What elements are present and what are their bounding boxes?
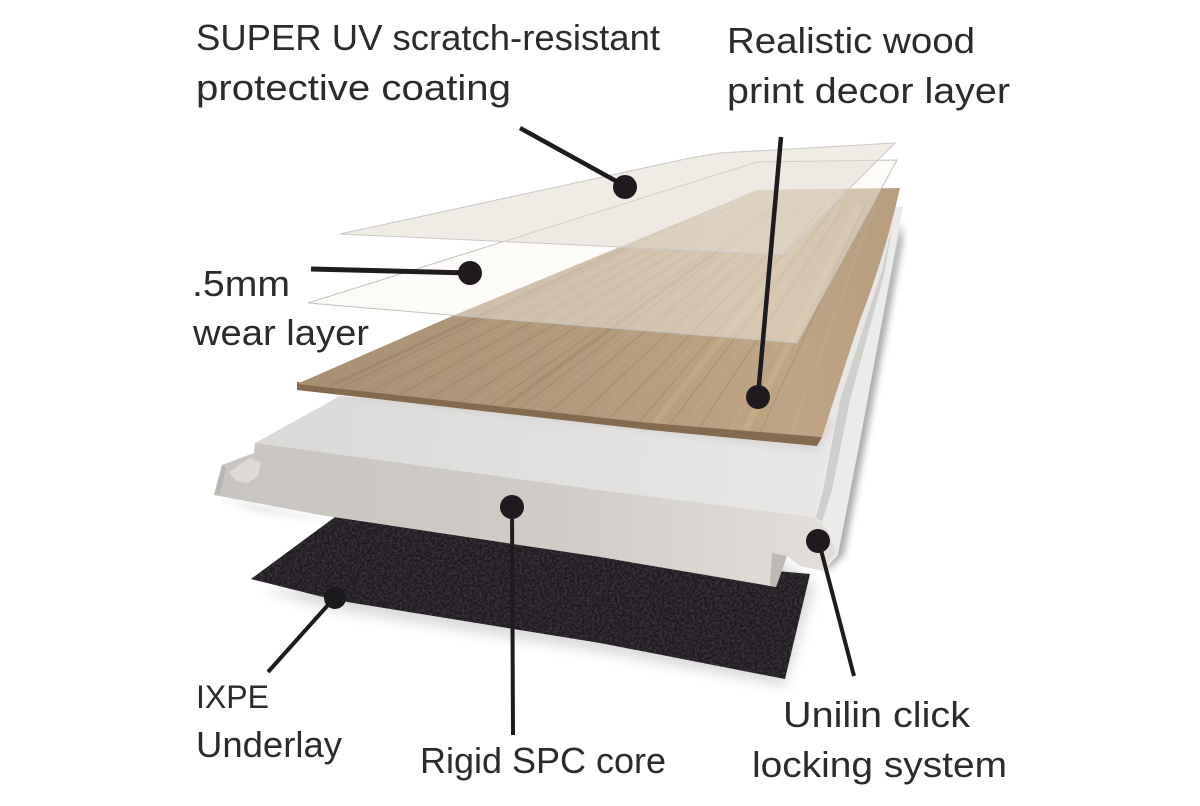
layer: IXPE underlay xyxy=(251,517,810,679)
label: coating: protective coating xyxy=(196,67,511,108)
label: SPC core: Rigid SPC core xyxy=(420,740,666,781)
flooring layers diagram xyxy=(193,24,1010,784)
label: coating: SUPER UV scratch-resistant xyxy=(196,17,660,58)
callout: wear layer xyxy=(311,261,482,285)
label: wear layer xyxy=(192,263,369,353)
wood shadow xyxy=(310,392,835,452)
core groove notch xyxy=(770,553,787,587)
core groove shading xyxy=(816,222,893,522)
label: wood print xyxy=(727,20,1010,111)
core top surface xyxy=(255,222,893,517)
label: wood print: Realistic wood xyxy=(727,20,975,61)
label: coating xyxy=(196,17,660,108)
label: click lock: locking system xyxy=(752,744,1007,785)
label: wear layer: wear layer xyxy=(192,312,369,353)
wood edge xyxy=(297,382,822,446)
label: underlay: IXPE xyxy=(196,679,269,715)
core left shadow xyxy=(218,498,340,522)
core right locking strip xyxy=(815,206,903,571)
wood grain xyxy=(330,205,875,436)
callout: SPC core xyxy=(500,495,524,735)
layer: rigid SPC core xyxy=(214,206,903,587)
label: click lock: Unilin click xyxy=(783,694,971,735)
callout: click lock xyxy=(806,529,854,676)
layer: .5mm wear film xyxy=(308,160,897,343)
label: underlay xyxy=(196,679,342,765)
callout: wood print xyxy=(746,137,781,409)
label: underlay: Underlay xyxy=(196,724,342,765)
callout: underlay xyxy=(268,587,346,672)
callout: coating xyxy=(520,128,637,199)
label: wear layer: .5mm xyxy=(192,263,290,304)
wood top surface xyxy=(297,188,900,437)
layer: wood print decor xyxy=(297,188,900,446)
core tongue highlight xyxy=(229,458,261,483)
core side shadow xyxy=(826,222,903,572)
layer: UV protective coating film xyxy=(340,143,895,255)
label: click lock xyxy=(752,694,1007,785)
underlay shadow xyxy=(262,560,815,686)
label: wood print: print decor layer xyxy=(727,70,1010,111)
core front face xyxy=(214,443,836,587)
